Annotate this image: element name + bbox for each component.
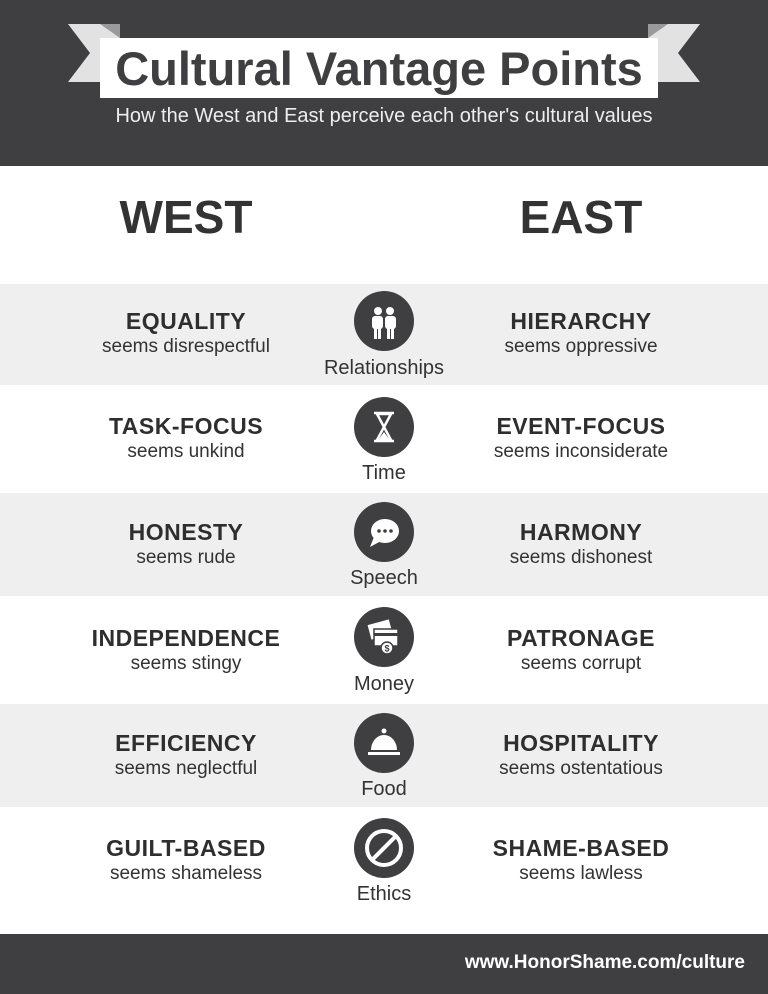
row: speech: HARMONY: [520, 519, 642, 545]
row: money: seems stingy: [131, 653, 241, 674]
row: relationships: seems oppressive: [504, 336, 658, 357]
row: speech: seems rude: [136, 547, 236, 568]
row: food: Food: [361, 778, 407, 800]
row: speech: seems dishonest: [510, 547, 652, 568]
row: money: [92, 607, 655, 695]
row: speech: HONESTY: [129, 519, 243, 545]
row: relationships: EQUALITY: [126, 308, 246, 334]
icon: money cards: [354, 607, 414, 667]
row: relationships: seems disrespectful: [102, 336, 270, 357]
row: time: seems unkind: [127, 441, 245, 462]
footer url: www.HonorShame.com/culture: [465, 952, 745, 973]
icon: cloche: [354, 713, 414, 773]
row: money: INDEPENDENCE: [92, 625, 280, 651]
row: relationships: [102, 291, 658, 379]
heading: west: WEST: [120, 191, 252, 243]
row: ethics: GUILT-BASED: [106, 835, 266, 861]
icon: people: [354, 291, 414, 351]
row: time: [109, 397, 668, 484]
subtitle: How the West and East perceive each other's cultural values: [115, 105, 653, 127]
row: ethics: seems shameless: [110, 863, 262, 884]
row: money: seems corrupt: [521, 653, 641, 674]
row: time: seems inconsiderate: [494, 441, 668, 462]
row: food: [115, 713, 663, 800]
icon: hourglass: [354, 397, 414, 457]
row: food: HOSPITALITY: [503, 730, 659, 756]
row: time: EVENT-FOCUS: [496, 413, 666, 439]
header: [0, 0, 768, 166]
row: relationships: HIERARCHY: [510, 308, 652, 334]
row: ethics: seems lawless: [519, 863, 643, 884]
title ribbon: [68, 24, 700, 98]
row: time: TASK-FOCUS: [109, 413, 263, 439]
row: food: EFFICIENCY: [115, 730, 257, 756]
row: relationships: Relationships: [324, 357, 444, 379]
icon: money cards: $: [384, 644, 390, 654]
row: money: Money: [354, 673, 414, 695]
row: ethics: [106, 818, 669, 905]
row: speech: Speech: [350, 567, 418, 589]
row: food: seems ostentatious: [499, 758, 663, 779]
row: ethics: Ethics: [357, 883, 411, 905]
icon: speech bubble: [354, 502, 414, 562]
heading: east: EAST: [520, 191, 642, 243]
title: Cultural Vantage Points: [115, 42, 643, 95]
icon: prohibition: [354, 818, 414, 878]
row: time: Time: [362, 462, 406, 484]
row: speech: [129, 502, 652, 589]
row: ethics: SHAME-BASED: [493, 835, 669, 861]
row: money: PATRONAGE: [507, 625, 655, 651]
row: food: seems neglectful: [115, 758, 257, 779]
footer: [0, 934, 768, 994]
